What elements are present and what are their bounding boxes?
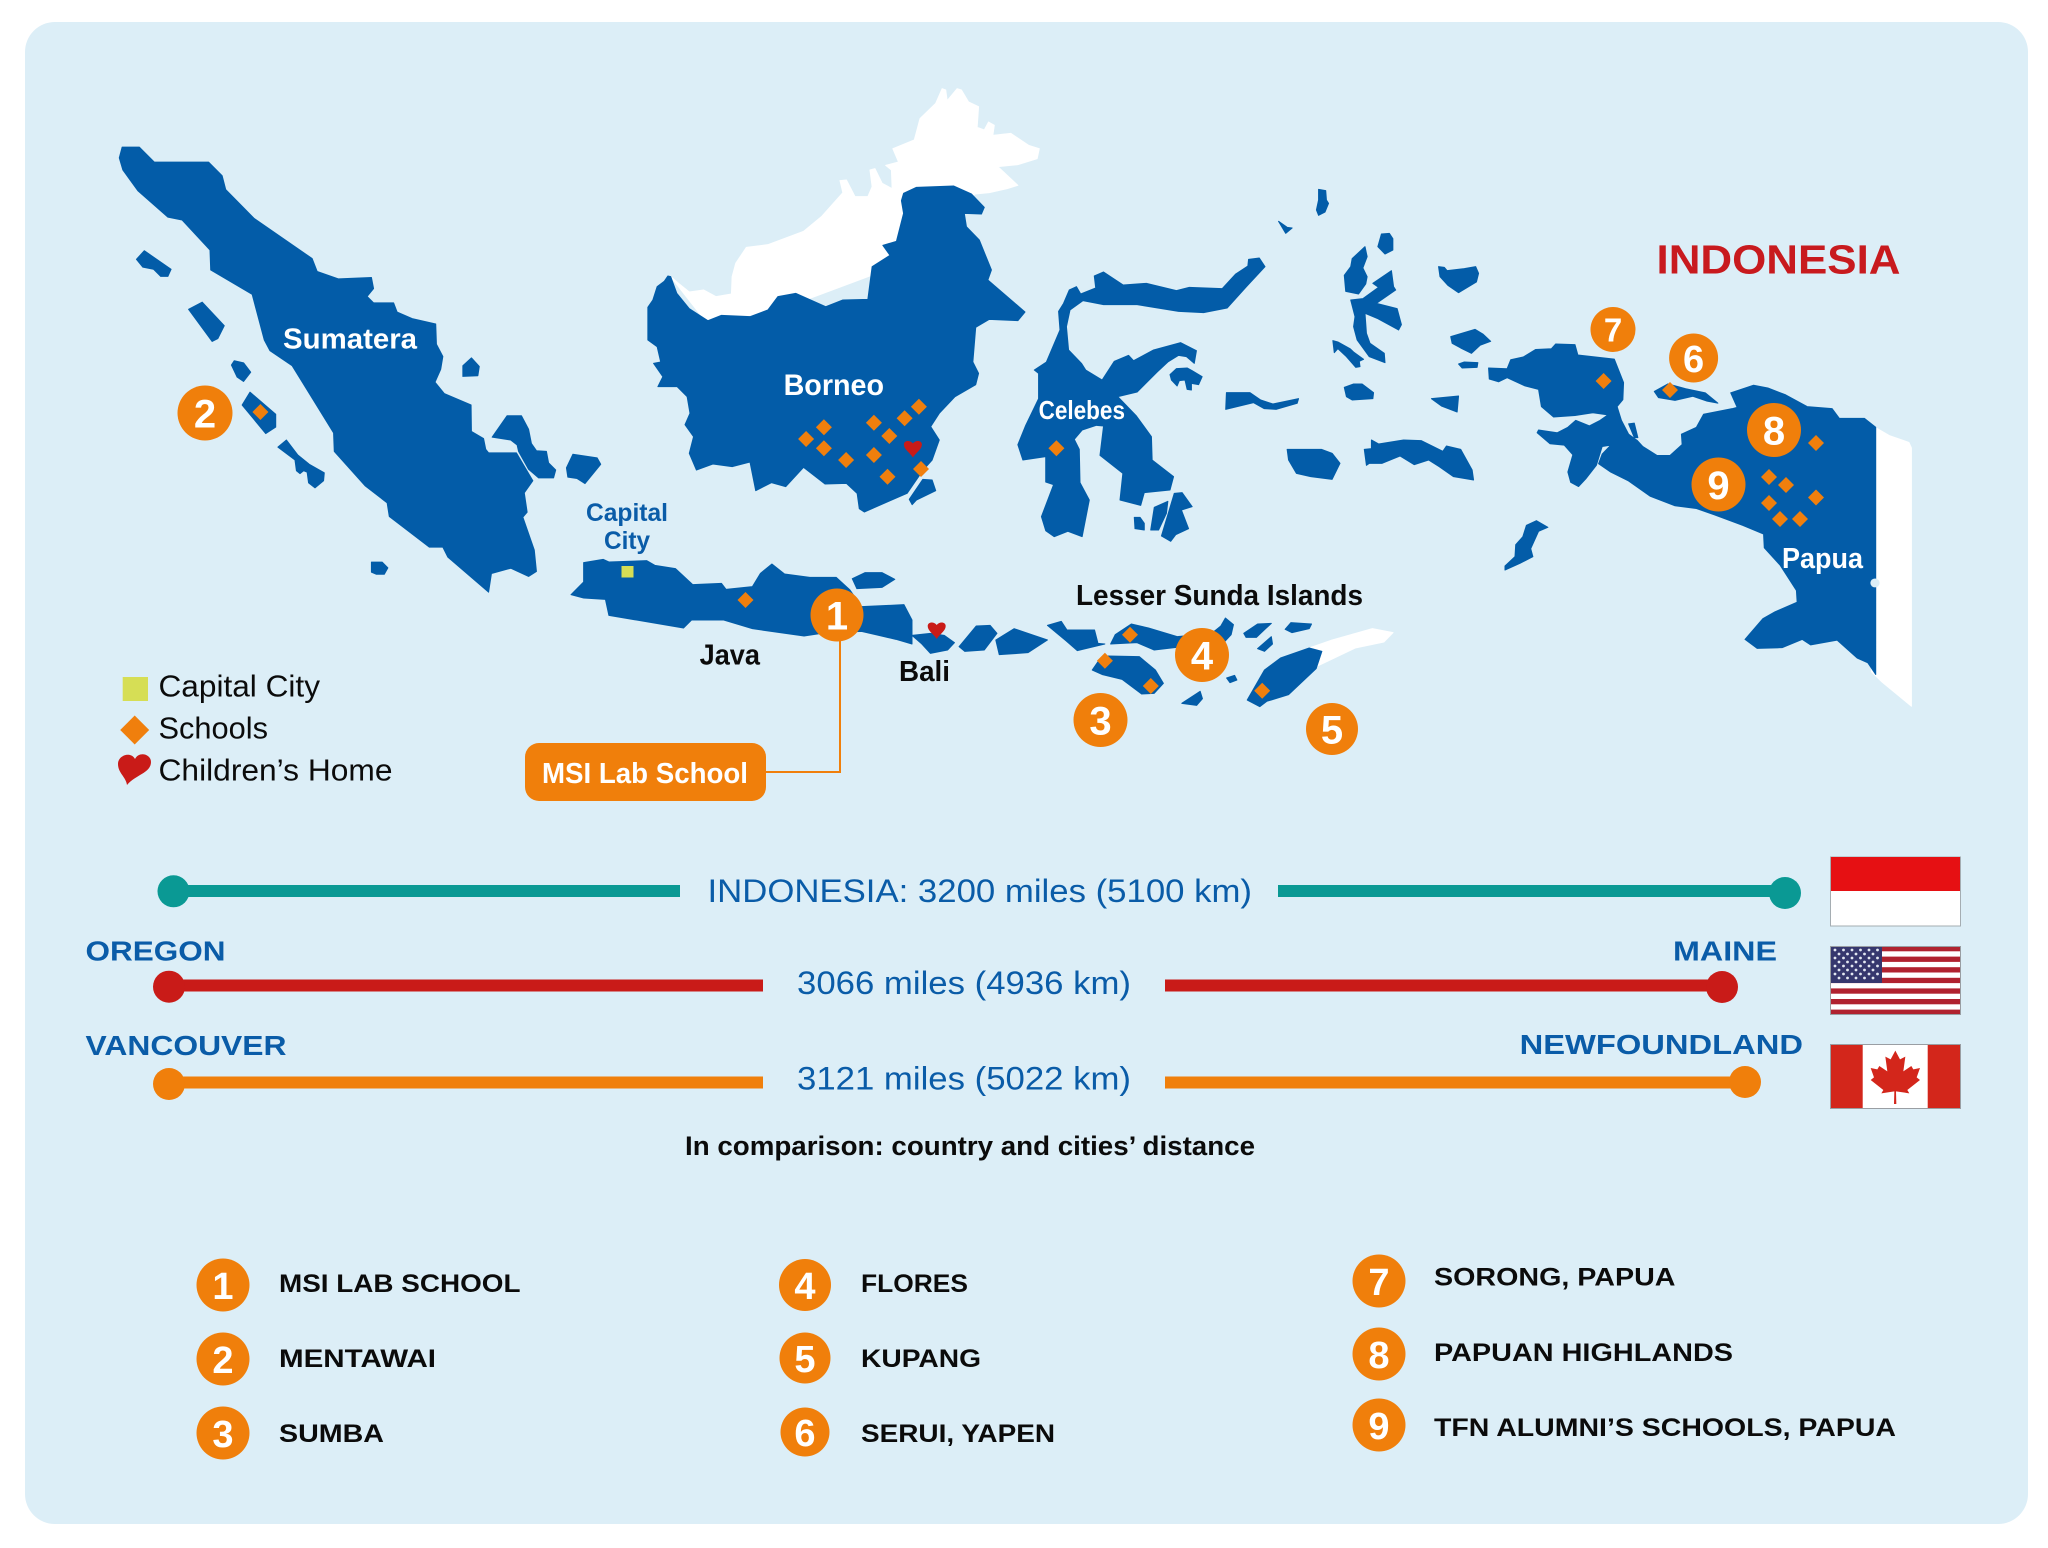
flag: United States [1830,946,1961,1015]
map labels: Borneo [784,369,884,402]
caption: comparison: In comparison: country and cities’ distance [685,1131,1255,1161]
list item 7: 7 [1368,1262,1390,1304]
legend: schools: Schools [158,711,268,746]
distance bar: Oregon to Maine: MAINE [1673,936,1777,967]
list item 2: 2 [212,1340,234,1382]
list item 8: PAPUAN HIGHLANDS [1434,1339,1733,1367]
list item 4 [779,1259,968,1311]
map labels: Capital [586,499,668,527]
map labels: Java [700,640,761,672]
distance bar: Oregon to Maine: 3066 miles (4936 km) [797,965,1131,1001]
numbered markers on map: 2 [194,392,216,436]
list item 8 [1352,1328,1733,1380]
list item 9: 9 [1368,1406,1390,1448]
map labels: Bali [899,656,950,688]
island: Sumatera with western islands [119,147,601,592]
list item 3: SUMBA [279,1420,384,1448]
map labels: City [604,527,650,555]
list item 1: 1 [212,1266,234,1308]
list item 5 [780,1332,981,1384]
map labels [283,324,1864,688]
list item 3: 3 [212,1414,234,1456]
distance bar: Oregon to Maine [86,936,1777,1003]
list item 9: TFN ALUMNI’S SCHOOLS, PAPUA [1434,1414,1896,1442]
list item 3 [196,1406,384,1460]
distance bar: Vancouver to Newfoundland [86,1029,1803,1100]
list item 1 [196,1258,520,1312]
list item 1: MSI LAB SCHOOL [279,1270,520,1298]
distance bar: Indonesia [158,873,1801,909]
map of Indonesia [119,89,1911,801]
list item 7 [1352,1254,1676,1308]
list item 6 [780,1408,1055,1456]
title: INDONESIA [1656,237,1900,283]
map labels: Celebes [1039,395,1125,425]
list item 6: 6 [794,1413,816,1455]
connector line: MSI Lab School [766,630,840,772]
map labels: Lesser Sunda Islands [1076,580,1363,612]
island: Papua [1489,344,1911,706]
islands: Java, Bali and Lesser Sunda [571,559,1393,707]
list item 4: FLORES [861,1270,968,1298]
numbered markers on map: 5 [1321,708,1343,752]
list item 2 [196,1332,436,1386]
numbered markers on map: 9 [1707,464,1730,508]
legend: children's home: Children’s Home [158,753,392,788]
numbered markers on map: 1 [826,594,848,638]
distance bar: Oregon to Maine: OREGON [86,936,226,967]
list item 4: 4 [794,1266,816,1308]
numbered markers on map: 3 [1089,700,1112,744]
capital city marker [622,566,634,578]
flag: Canada [1830,1044,1961,1109]
list item 9 [1352,1398,1896,1452]
list item 8: 8 [1368,1335,1390,1377]
list item 7: SORONG, PAPUA [1434,1264,1676,1292]
island: Celebes and Maluku islands [1018,189,1548,570]
numbered markers on map: 8 [1763,410,1785,454]
list item 5: KUPANG [861,1345,981,1373]
distance bar: Vancouver to Newfoundland: NEWFOUNDLAND [1520,1029,1803,1060]
callout: MSI Lab School: MSI Lab School [542,758,748,790]
numbered markers on map: 4 [1191,634,1214,678]
list item 5: 5 [794,1339,816,1381]
distance bar: Indonesia: INDONESIA: 3200 miles (5100 km) [708,873,1252,909]
legend: capital city: Capital City [158,669,321,704]
flag: Indonesia [1830,857,1960,926]
distance bar: Vancouver to Newfoundland: VANCOUVER [86,1030,286,1061]
numbered markers on map: 7 [1604,312,1622,348]
numbered markers on map [178,307,1801,755]
list item 6: SERUI, YAPEN [861,1420,1055,1448]
children's home marker: Borneo [904,441,922,458]
callout: MSI Lab School [525,743,766,801]
distance comparison [86,873,1803,1161]
distance bar: Vancouver to Newfoundland: 3121 miles (5022 km) [797,1061,1131,1097]
numbered markers on map: 6 [1683,339,1704,381]
list item 2: MENTAWAI [279,1345,436,1373]
map labels: Papua [1782,543,1864,575]
island: Borneo [648,89,1039,512]
map labels: Sumatera [283,324,418,356]
numbered list of locations [196,1254,1896,1460]
school markers [252,373,1824,699]
legend [118,669,392,788]
children's home marker: Bali [928,622,946,639]
